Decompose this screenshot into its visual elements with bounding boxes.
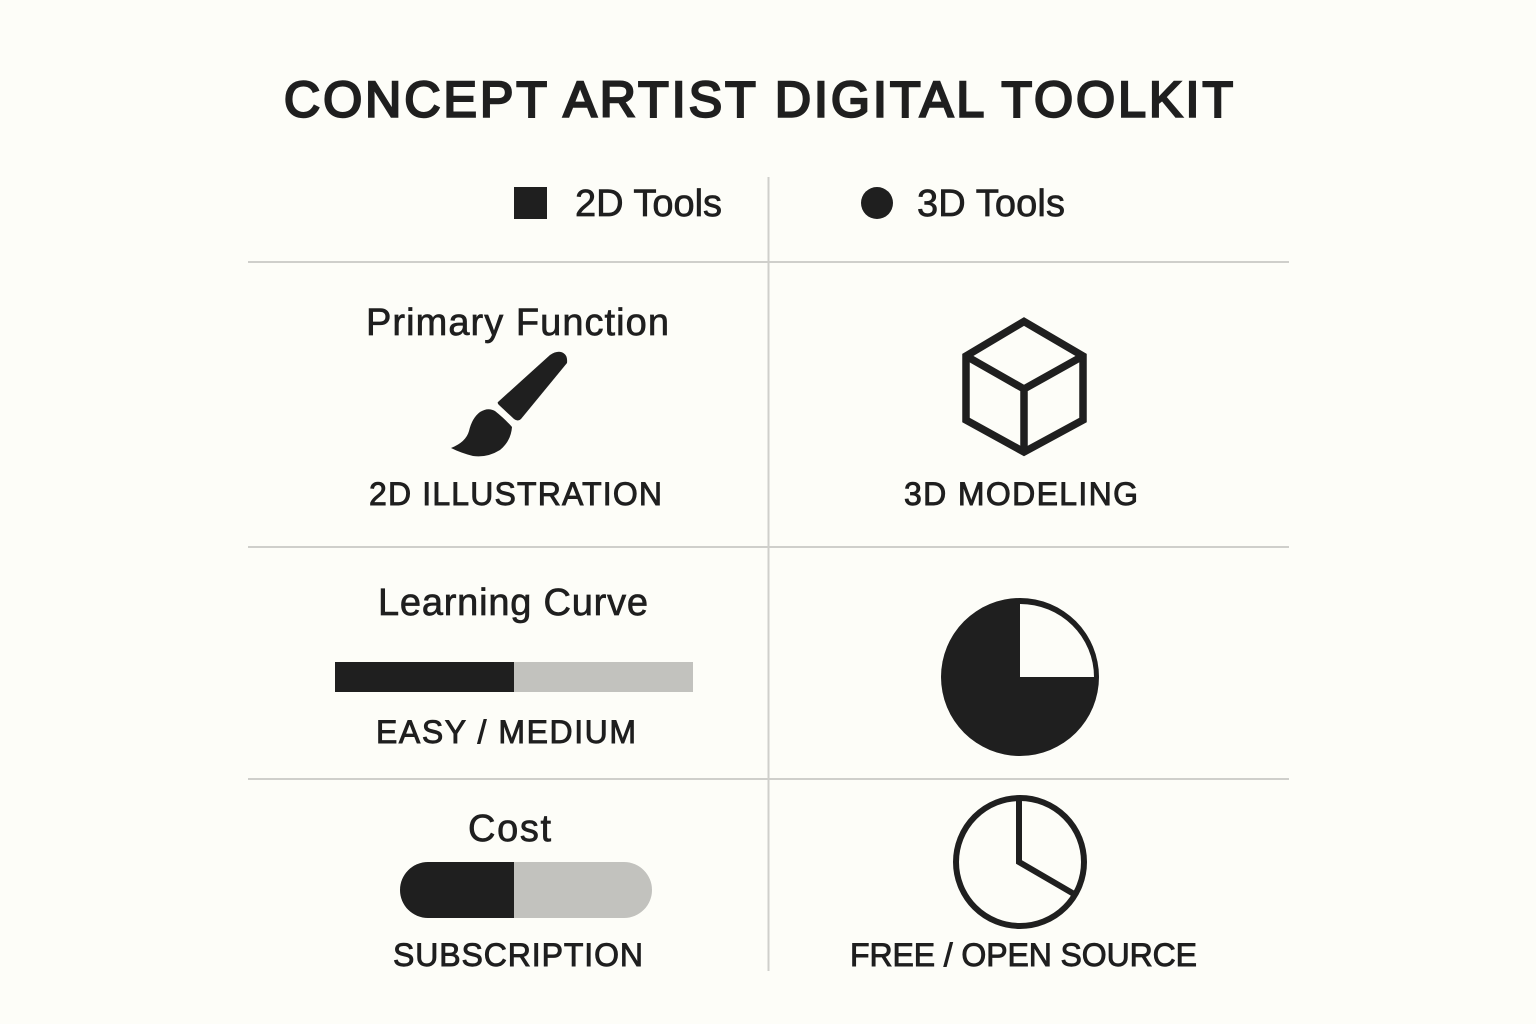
panel: primary function, 3D (904, 322, 1138, 512)
legend: 3D tools: 3D Tools (917, 183, 1065, 225)
label: 2D illustration: 2D ILLUSTRATION (369, 476, 662, 512)
icon: paintbrush (451, 352, 567, 456)
heading: cost: Cost (468, 808, 551, 850)
panel: learning curve, 2D (335, 582, 693, 750)
label: free / open source: FREE / OPEN SOURCE (850, 937, 1197, 973)
pill: subscription (400, 862, 652, 918)
icon: outlined pie (956, 798, 1084, 926)
icon: three-quarter pie, learning curve 3D (941, 598, 1099, 756)
panel: cost, 3D (850, 798, 1197, 973)
icon: cube (966, 322, 1083, 452)
heading: primary function: Primary Function (366, 302, 669, 344)
bar: easy to medium (335, 662, 693, 692)
title: CONCEPT ARTIST DIGITAL TOOLKIT (284, 72, 1233, 128)
label: subscription: SUBSCRIPTION (393, 937, 643, 973)
label: 3D modeling: 3D MODELING (904, 476, 1138, 512)
panel: cost, 2D (393, 808, 652, 973)
panel: primary function, 2D (366, 302, 669, 512)
label: easy / medium: EASY / MEDIUM (376, 714, 636, 750)
legend: 2D tools: 2D Tools (575, 183, 722, 225)
heading: learning curve: Learning Curve (378, 582, 648, 624)
